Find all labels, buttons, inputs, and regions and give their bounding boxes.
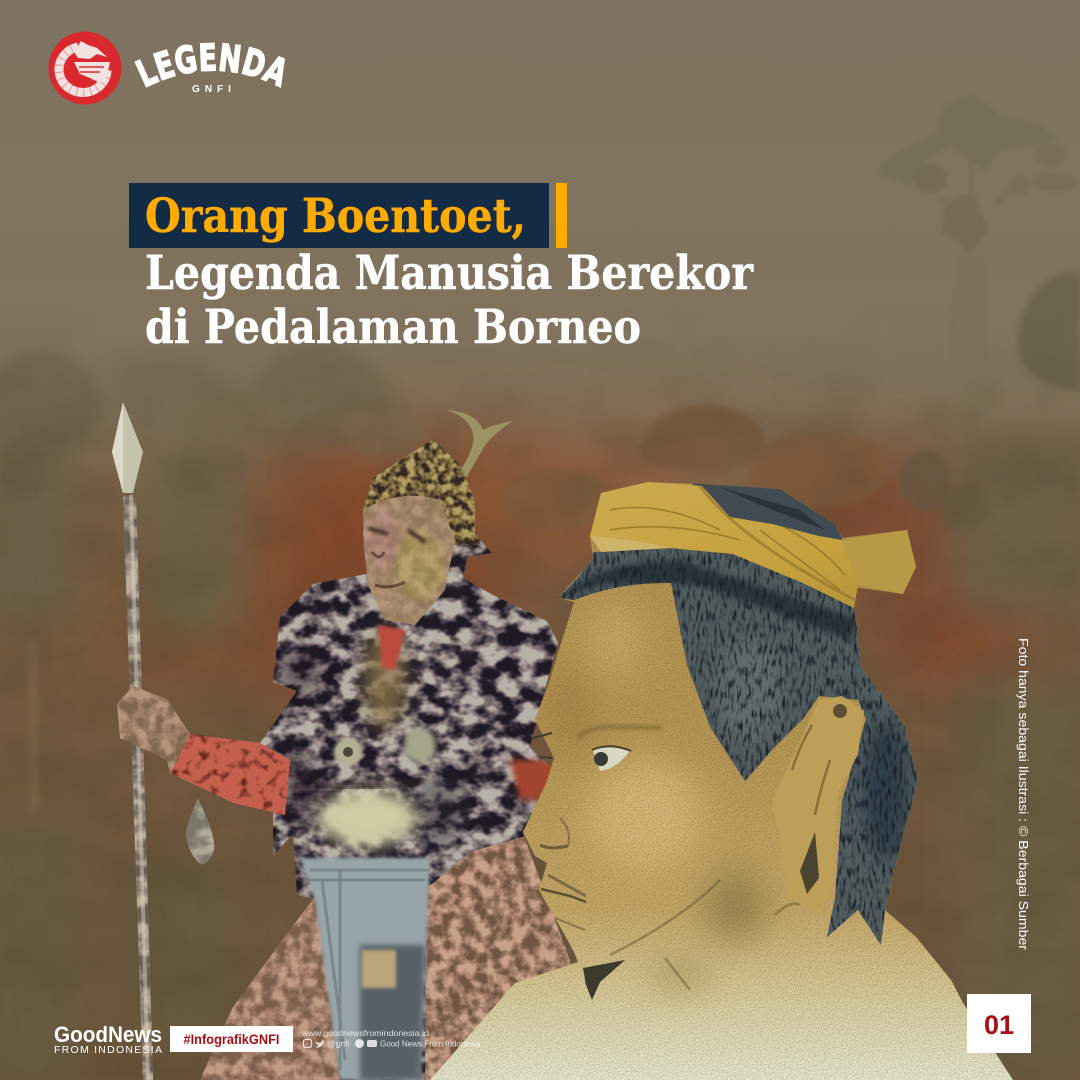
footer: website and social handles <box>301 1028 480 1048</box>
skin grain <box>420 480 1030 1080</box>
fur vest <box>110 430 580 1080</box>
vest shading <box>276 630 466 850</box>
bare midriff <box>318 790 418 846</box>
facial shading <box>552 600 763 987</box>
skirt <box>425 836 570 1080</box>
warrior pendant <box>186 799 214 864</box>
side hair <box>558 548 918 945</box>
footer: GoodNews logo: GoodNews <box>54 1022 162 1047</box>
headband <box>585 478 920 613</box>
necklace ornaments <box>334 738 362 766</box>
footer: hashtag label <box>170 1026 293 1052</box>
warrior spear <box>112 402 153 1080</box>
man skin <box>420 480 1030 1080</box>
footer: GoodNews logo: FROM INDONESIA <box>54 1044 162 1056</box>
rust red haze band <box>90 426 1020 730</box>
ear details <box>792 704 847 894</box>
foreground man portrait <box>420 478 1030 1080</box>
warrior face <box>363 496 455 625</box>
warrior hand <box>117 686 190 774</box>
background mottling <box>3 410 1074 878</box>
title line 1: Orang Boentoet, <box>145 189 526 244</box>
logo: Legenda wordmark: GNFI <box>192 84 236 95</box>
belly shadow <box>315 780 425 787</box>
page number badge <box>967 994 1031 1053</box>
title accent bar <box>556 183 567 248</box>
red sleeve arm <box>170 734 290 815</box>
goatee <box>583 960 625 1000</box>
title block <box>129 183 754 355</box>
tree silhouette, top right <box>880 95 1077 360</box>
hair above headband <box>692 484 842 540</box>
tree silhouette, far right <box>1018 272 1080 392</box>
brow <box>578 727 662 738</box>
logo: GNFI dragon emblem <box>48 32 122 104</box>
spear head <box>112 402 143 493</box>
title highlight box <box>129 183 549 248</box>
jaw and neck line <box>610 880 800 990</box>
midground tree crowns <box>500 406 989 536</box>
nose and mouth lines <box>540 818 586 930</box>
title line 2: Legenda Manusia Berekor <box>145 246 754 301</box>
warrior figure <box>110 402 590 1080</box>
title line 3: di Pedalaman Borneo <box>145 300 641 355</box>
logo: Legenda wordmark: LEGENDA <box>134 42 285 88</box>
left leg <box>190 890 340 1080</box>
footer: hashtag label: #InfografikGNFI <box>184 1032 280 1047</box>
olive forest masses <box>0 420 1080 1080</box>
distant tree crowns, left <box>0 343 425 460</box>
social icons <box>304 1039 377 1048</box>
red neck scarf <box>378 625 405 670</box>
ear with stretched lobe <box>772 696 864 910</box>
footer: website and social handles: www.goodnewsfromindonesia.id <box>301 1028 429 1038</box>
pale tree trunk, left <box>27 640 38 810</box>
footer: website and social handles: @gnfi <box>327 1038 349 1048</box>
spear shaft <box>123 495 153 1080</box>
kilt folds <box>305 870 430 1070</box>
warrior body <box>110 430 590 1080</box>
crown <box>360 435 480 545</box>
kilt cloth <box>300 858 430 1080</box>
page number badge: 01 <box>984 1010 1014 1040</box>
footer: website and social handles: Good News From Indonesia <box>380 1038 480 1048</box>
eye <box>533 733 631 771</box>
photo credit, vertical: Foto hanya sebagai Ilustrasi : © Berbagai Sumber <box>1016 638 1030 950</box>
warrior horn ornament <box>447 410 513 478</box>
